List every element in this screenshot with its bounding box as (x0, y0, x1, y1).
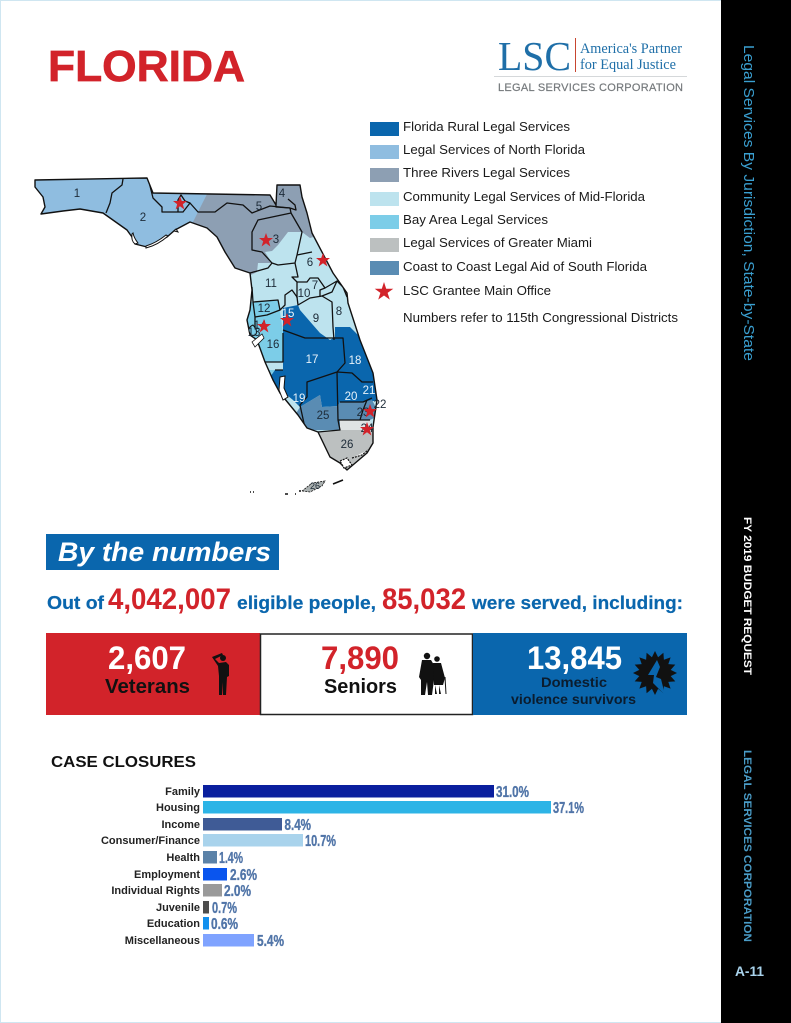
district numbers: 25 (317, 410, 329, 422)
stat: domestic violence survivors: 13,845 (527, 640, 622, 676)
summary sentence: 85,032 (382, 583, 466, 616)
district numbers: 22 (374, 399, 386, 411)
district numbers: 2 (140, 212, 146, 224)
stat: domestic violence survivors (473, 633, 687, 715)
district numbers: 5 (256, 201, 262, 213)
map legend: Coast to Coast Legal Aid of South Florida (403, 260, 647, 274)
logo: LSC: LEGAL SERVICES CORPORATION (498, 82, 683, 94)
logo: LSC: America's Partner (580, 41, 682, 57)
bar chart: case closures: Housing (156, 802, 200, 814)
icon: elderly couple (419, 653, 446, 695)
logo: LSC: for Equal Justice (580, 57, 676, 73)
map legend: Legal Services of Greater Miami (403, 236, 592, 250)
page number: A-11 (735, 963, 764, 979)
summary sentence: eligible people, (237, 592, 376, 613)
district numbers: 13 (248, 327, 260, 339)
bar chart: case closures: Income (161, 819, 200, 831)
district numbers: 17 (306, 354, 318, 366)
district numbers: 26 (341, 439, 353, 451)
district numbers: 9 (313, 313, 319, 325)
bar chart: case closures: Family (165, 786, 201, 798)
sidebar title: Legal Services By Jurisdiction, State-by-State (740, 45, 757, 361)
stat: domestic violence survivors: violence survivors (511, 691, 636, 707)
bar chart: case closures: Juvenile (156, 902, 200, 914)
sidebar (721, 0, 791, 1023)
district numbers: 19 (293, 393, 305, 405)
district numbers: 11 (265, 278, 277, 290)
bar chart: case closures: 0.6% (211, 916, 238, 933)
bar chart: case closures: 0.7% (212, 900, 237, 917)
map of Florida (30, 170, 390, 494)
district numbers: 1 (74, 188, 80, 200)
bar chart: case closures: 2.0% (224, 883, 251, 900)
bar chart: case closures: 8.4% (284, 817, 311, 834)
map legend: Three Rivers Legal Services (403, 166, 570, 180)
heading: case closures: CASE CLOSURES (51, 754, 196, 771)
district numbers (74, 188, 386, 491)
stat: domestic violence survivors: Domestic (541, 674, 607, 690)
map legend: Bay Area Legal Services (403, 213, 548, 227)
district numbers: 4 (279, 188, 286, 200)
district numbers: 10 (298, 288, 310, 300)
bar chart: case closures: 31.0% (496, 784, 529, 801)
organization label: LEGAL SERVICES CORPORATION (741, 750, 753, 942)
stat: veterans: 2,607 (108, 640, 186, 676)
bar chart: case closures: 37.1% (553, 800, 584, 817)
district numbers: 15 (282, 308, 294, 320)
district numbers: 16 (267, 339, 279, 351)
map legend: Florida Rural Legal Services (403, 120, 570, 134)
bar chart: case closures: Miscellaneous (125, 935, 200, 947)
stat: seniors: 7,890 (321, 640, 399, 676)
district numbers: 14 (254, 320, 267, 332)
district numbers: 21 (363, 385, 375, 397)
logo: LSC: LSC (498, 33, 571, 79)
map legend: LSC Grantee Main Office (403, 284, 551, 298)
bar chart: case closures: Health (166, 852, 200, 864)
district numbers: 7 (312, 280, 318, 292)
bar chart: case closures: Individual Rights (111, 885, 200, 897)
by the numbers banner: By the numbers (58, 537, 271, 567)
bar chart: case closures: 10.7% (305, 833, 336, 850)
district boundaries (106, 178, 373, 432)
stat: seniors (260, 634, 472, 714)
bar chart: case closures: 2.6% (230, 867, 257, 884)
district numbers: 18 (349, 355, 361, 367)
map legend: Community Legal Services of Mid-Florida (403, 190, 645, 204)
bar chart: case closures: Consumer/Finance (101, 835, 200, 847)
summary sentence (47, 583, 683, 616)
district numbers: 23 (357, 407, 369, 419)
map legend (370, 120, 678, 325)
district numbers: 26 (310, 481, 320, 491)
summary sentence: were served, including: (471, 592, 683, 613)
budget request label: FY 2019 BUDGET REQUEST (741, 517, 753, 675)
district numbers: 3 (273, 234, 279, 246)
title: FLORIDA (48, 42, 245, 91)
district numbers: 24 (361, 423, 374, 435)
stat: seniors: Seniors (324, 676, 397, 698)
icon: saluting soldier (212, 653, 229, 695)
stat: veterans: Veterans (105, 676, 190, 698)
summary sentence: 4,042,007 (108, 583, 231, 616)
bar chart: case closures (101, 784, 584, 950)
bar chart: case closures: 5.4% (257, 933, 284, 950)
district numbers: 20 (345, 391, 357, 403)
stat: veterans (46, 633, 260, 715)
bar chart: case closures: 1.4% (219, 850, 243, 867)
district numbers: 8 (336, 306, 342, 318)
map legend: Numbers refer to 115th Congressional Districts (403, 311, 678, 325)
bar chart: case closures: Education (147, 918, 200, 930)
bar chart: case closures: Employment (134, 869, 200, 881)
logo: LSC (494, 33, 687, 94)
icon: burst with lightning bolt (633, 651, 677, 695)
map legend: Legal Services of North Florida (403, 143, 585, 157)
summary sentence: Out of (47, 592, 105, 613)
district numbers: 12 (258, 303, 270, 315)
Florida coastline (35, 178, 377, 470)
grantee office stars (173, 196, 377, 436)
district numbers: 6 (307, 257, 313, 269)
